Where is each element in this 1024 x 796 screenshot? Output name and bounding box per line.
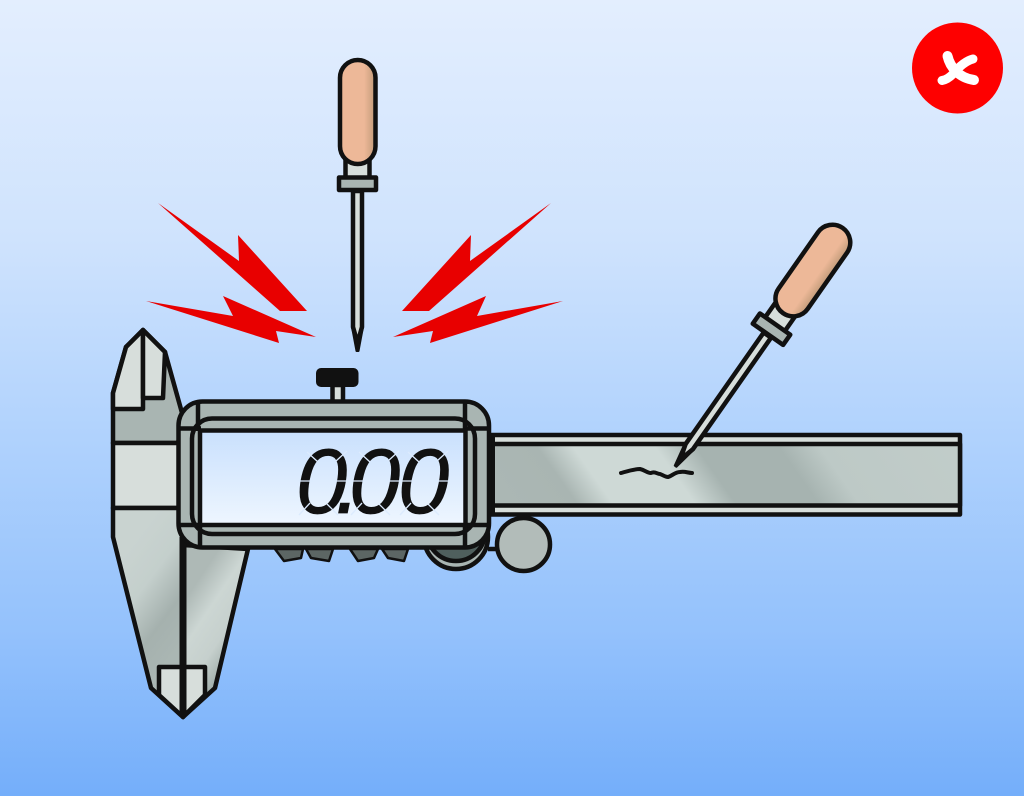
buttons <box>275 549 408 561</box>
display reading: 0.00 <box>296 431 449 533</box>
caliper <box>113 330 960 717</box>
screwdriver: angled, scratching <box>660 217 858 477</box>
display housing <box>178 402 489 548</box>
badge: red cross <box>912 22 1003 114</box>
crack in beam <box>621 469 692 477</box>
jaw lower <box>113 508 248 717</box>
lightning bolts: impact <box>146 203 563 343</box>
lock knob <box>317 369 358 402</box>
beam with scratch <box>480 433 960 516</box>
depth jaw upper <box>113 330 184 508</box>
screwdriver: vertical, striking <box>339 60 376 351</box>
screen <box>200 430 466 525</box>
thumb wheel <box>424 503 550 571</box>
